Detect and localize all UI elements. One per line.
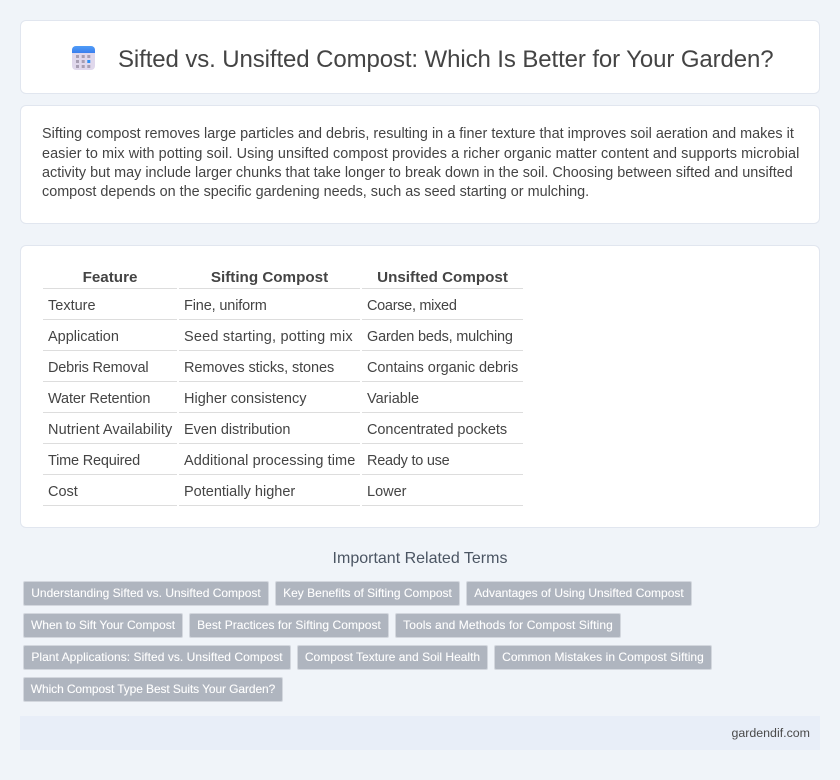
row: cost: Cost [48, 484, 78, 500]
summary text [42, 126, 799, 200]
heading: related terms: Important Related Terms [333, 550, 507, 567]
table header: Feature [83, 269, 137, 286]
tag [23, 645, 291, 670]
panel: comparison table [20, 245, 820, 528]
title: Sifted vs. Unsifted Compost: Which Is Better for Your Garden? [118, 46, 774, 73]
tag [23, 677, 283, 702]
summary text: easier to mix with potting soil. Using unsifted compost provides a richer organic matter content and supports microbial [42, 146, 799, 162]
panel: summary paragraph [20, 105, 820, 224]
table header: Unsifted Compost [377, 269, 508, 286]
row: debris removal: Debris Removal [48, 360, 148, 376]
row: texture [48, 298, 457, 314]
row: debris removal: Removes sticks, stones [184, 360, 334, 376]
summary text: activity but may include larger chunks that take longer to break down in the soil. Choosing between sifted and unsifted [42, 165, 793, 181]
summary text: compost depends on the specific gardening needs, such as seed starting or mulching. [42, 184, 589, 200]
tag: Understanding Sifted vs. Unsifted Compost [31, 586, 261, 600]
row: nutrient availability [48, 422, 507, 438]
tag [23, 581, 269, 606]
row: nutrient availability: Concentrated pockets [367, 422, 507, 438]
row: time required: Additional processing time [184, 453, 355, 469]
header panel [20, 20, 820, 94]
tag: Advantages of Using Unsifted Compost [474, 586, 684, 600]
footer credit: gardendif.com [731, 726, 810, 740]
row: texture: Coarse, mixed [367, 298, 457, 314]
tag [23, 613, 183, 638]
tag: Best Practices for Sifting Compost [197, 618, 381, 632]
footer [20, 716, 820, 750]
row: cost: Potentially higher [184, 484, 295, 500]
row: debris removal: Contains organic debris [367, 360, 518, 376]
tag: Common Mistakes in Compost Sifting [502, 650, 704, 664]
row: water retention: Variable [367, 391, 419, 407]
tag: Plant Applications: Sifted vs. Unsifted Compost [31, 650, 283, 664]
row: texture: Texture [48, 298, 96, 314]
row: debris removal [48, 360, 518, 376]
table header: Sifting Compost [211, 269, 328, 286]
row: application: Seed starting, potting mix [184, 329, 353, 345]
row: time required: Time Required [48, 453, 140, 469]
row: texture: Fine, uniform [184, 298, 267, 314]
row: cost: Lower [367, 484, 406, 500]
row: cost [48, 484, 406, 500]
tag: Which Compost Type Best Suits Your Garden? [31, 682, 275, 696]
row: water retention [48, 391, 419, 407]
tag [189, 613, 389, 638]
table header [83, 269, 508, 286]
icon: calendar [72, 46, 95, 70]
summary text: Sifting compost removes large particles and debris, resulting in a finer texture that improves soil aeration and makes it [42, 126, 794, 142]
row: application: Application [48, 329, 119, 345]
row: water retention: Water Retention [48, 391, 150, 407]
related terms tags [23, 581, 712, 702]
row: nutrient availability: Even distribution [184, 422, 290, 438]
tag: Key Benefits of Sifting Compost [283, 586, 452, 600]
row: application [48, 329, 513, 345]
row: time required [48, 453, 449, 469]
row: nutrient availability: Nutrient Availability [48, 422, 172, 438]
tag [466, 581, 692, 606]
row: time required: Ready to use [367, 453, 449, 469]
tag: When to Sift Your Compost [31, 618, 175, 632]
tag [297, 645, 488, 670]
tag: Compost Texture and Soil Health [305, 650, 480, 664]
tag: Tools and Methods for Compost Sifting [403, 618, 613, 632]
row: water retention: Higher consistency [184, 391, 306, 407]
tag [395, 613, 621, 638]
tag [494, 645, 712, 670]
row: application: Garden beds, mulching [367, 329, 513, 345]
tag [275, 581, 460, 606]
